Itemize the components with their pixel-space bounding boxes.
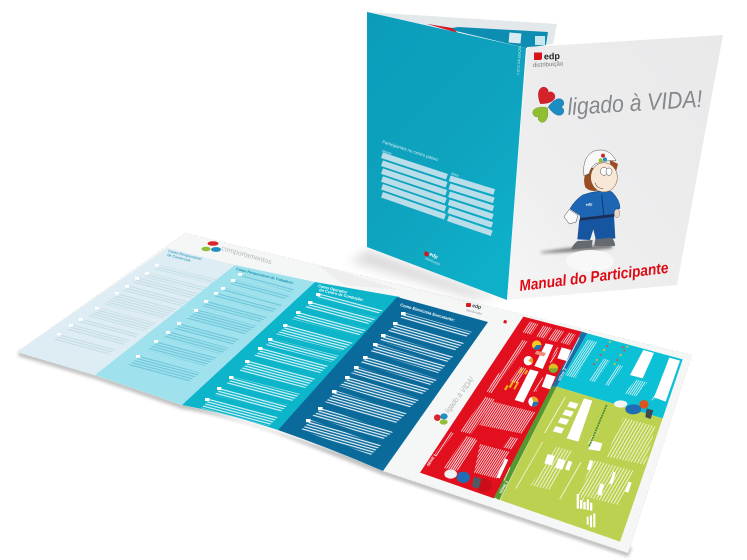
logo: brochure edp [466, 303, 483, 316]
heading: comercial: Como Responsável [168, 249, 202, 261]
heading line two: comercial: de Comercial: [167, 253, 191, 263]
cyan text blocks [565, 339, 659, 401]
form label: area: Área [451, 172, 459, 178]
red heart [533, 85, 557, 109]
face [591, 163, 617, 192]
smile [595, 183, 603, 189]
cyan background [557, 333, 683, 418]
section strips [552, 332, 587, 387]
heading: trabalhos: Como Responsável de Trabalhos: [236, 267, 294, 285]
title: ligado a vida: ligado à VIDA! [567, 86, 703, 121]
left hand [564, 209, 578, 224]
form label: name: Nome [382, 149, 392, 156]
subtitle: manual do participante: Manual do Participante [518, 260, 670, 295]
panel: comercial column [17, 248, 235, 375]
boots [571, 238, 615, 249]
bullets [205, 293, 320, 401]
logo: back cover edp [424, 251, 441, 267]
eyes [600, 167, 612, 175]
panel: cyan section [557, 333, 683, 418]
panel: operador column [182, 282, 400, 430]
strip rule lines [504, 337, 579, 481]
icon: three hearts logo [531, 85, 564, 124]
heading: ligado a vida small: ligado à VIDA! [443, 375, 476, 415]
green white boxes [544, 398, 632, 496]
greeked text blocks [128, 274, 295, 382]
heading: comportamentos: comportamentos [220, 245, 273, 266]
column background [182, 282, 400, 430]
green background [500, 387, 663, 542]
greeked text blocks [54, 265, 218, 355]
logo: brochure edp: distribuição [466, 308, 483, 316]
section label 1: SÉRIE 1 [425, 453, 437, 467]
brochure paper [17, 233, 692, 553]
brochure drop shadow [18, 350, 632, 557]
logo: edp distribuicao [533, 51, 564, 69]
panel: red section [420, 317, 587, 500]
jacket [570, 191, 620, 220]
icon: small hearts [434, 413, 448, 425]
heading: eletricista: Como Eletricista Executante: [400, 302, 456, 323]
logo: edp distribuicao: distribuição [533, 61, 564, 69]
character shadow and reflection [541, 244, 614, 272]
legs [577, 215, 615, 241]
column background [95, 265, 315, 405]
green divider [589, 405, 607, 447]
jacket logo: edp [586, 202, 593, 207]
right hand [614, 209, 620, 218]
helmet logo [599, 154, 607, 162]
panel: green section [500, 387, 663, 542]
blue heart [548, 99, 564, 115]
section label 2: SÉRIE 3 [498, 480, 509, 494]
jacket zip [602, 195, 604, 217]
panel: open brochure [17, 233, 692, 553]
helmet [584, 150, 616, 176]
white boxes [496, 343, 571, 478]
dot chart [593, 341, 628, 365]
green heart [531, 102, 553, 124]
red background [420, 317, 582, 498]
inner page peek [367, 12, 557, 48]
front cover surface [507, 35, 723, 300]
bullets [136, 273, 242, 358]
white tables [630, 350, 680, 402]
panel: folder front cover [507, 35, 723, 300]
form column: names [382, 155, 447, 217]
column background [278, 297, 488, 471]
character on cyan section [614, 400, 653, 419]
logo: small edp mark [503, 320, 507, 324]
bar chart [577, 494, 595, 527]
section label 3: SÉRIE 2 [557, 367, 568, 382]
green section strip [494, 387, 557, 500]
hair [584, 159, 618, 191]
cover shadow on brochure [350, 250, 500, 298]
mini bar chart [535, 351, 546, 356]
panel: folder back cover [367, 12, 557, 300]
logo: back cover edp: distribuição [425, 256, 441, 267]
red text blocks [434, 322, 576, 479]
panel: responsavel de trabalhos column [95, 265, 315, 405]
logo: brochure edp: edp [472, 303, 482, 311]
form heading: Participantes no centro passo: [382, 139, 439, 162]
pie charts [524, 340, 558, 407]
heading line two: operador: do Centro de Condução: [319, 287, 364, 302]
belt [580, 215, 614, 219]
logo: back cover edp: edp [428, 251, 439, 261]
form column: area [448, 178, 494, 233]
panel: right page content [420, 317, 683, 542]
red flame [476, 478, 492, 492]
fold shading [318, 266, 400, 290]
thumbnail cards [553, 401, 579, 434]
illustration: mascot worker [564, 150, 620, 249]
icon: comportamentos hearts [202, 241, 221, 252]
green text blocks [515, 397, 655, 505]
back cover surface [367, 12, 526, 300]
spine text: 1 2013 JUL EDIÇÃO [515, 45, 522, 75]
greeked text blocks [301, 313, 472, 455]
panel: eletricista column [278, 297, 488, 471]
red chart bars [504, 368, 528, 390]
bullets [306, 312, 406, 422]
greeked text blocks [201, 294, 383, 426]
logo: edp distribuicao: edp [544, 51, 561, 61]
heading: operador: Como Operador [318, 283, 348, 295]
bullets [57, 264, 159, 336]
column background [17, 248, 235, 375]
character on red section [444, 469, 481, 489]
